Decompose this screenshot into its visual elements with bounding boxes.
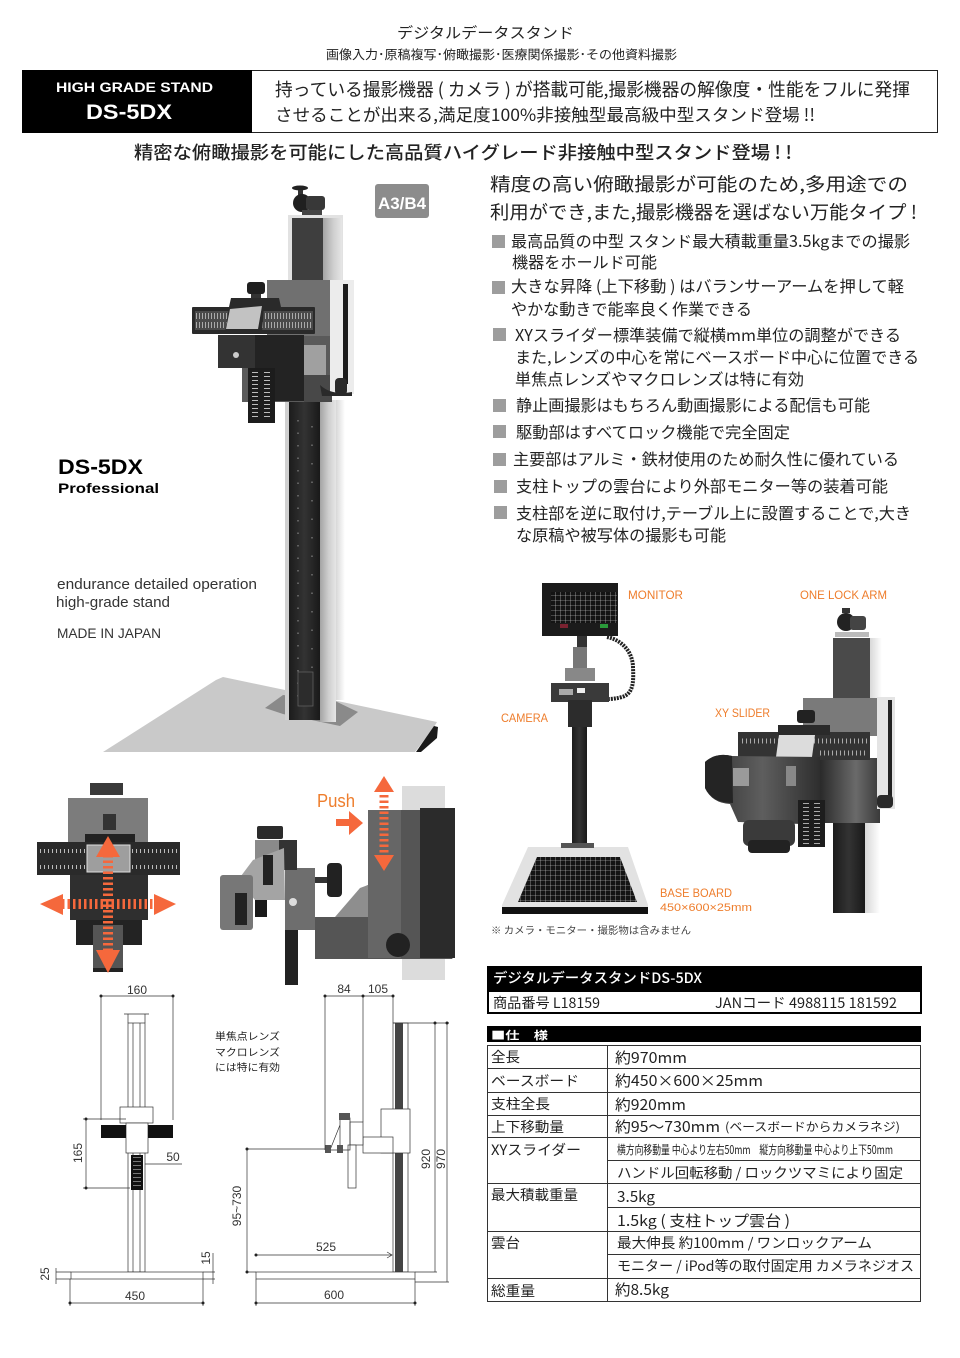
main stand photo bbox=[103, 186, 438, 752]
product badge bbox=[22, 70, 252, 133]
product badge: DS-5DX bbox=[86, 101, 172, 124]
product code panel: 商品番号 L18159 bbox=[493, 993, 600, 1013]
vertical push arrow bbox=[374, 776, 394, 871]
title: 画像入力･原稿複写･俯瞰撮影･医療関係撮影･その他資料撮影 bbox=[326, 44, 678, 63]
row values: ハンドル回転移動 / ロックツマミにより固定 bbox=[617, 1163, 903, 1183]
row values: モニター / iPod等の取付固定用 カメラネジオス bbox=[617, 1256, 914, 1276]
feature list: 単焦点レンズやマクロレンズは特に有効 bbox=[515, 366, 804, 390]
header description: させることが出来る,満足度100%非接触型最高級中型スタンド登場 !! bbox=[275, 101, 815, 126]
row values: 約450×600×25mm bbox=[615, 1070, 763, 1091]
label: base board: BASE BOARD bbox=[660, 886, 732, 900]
product code panel: デジタルデータスタンドDS-5DX bbox=[493, 968, 703, 988]
spec heading bbox=[487, 1026, 921, 1043]
feature list: また,レンズの中心を常にベースボード中心に位置できる bbox=[515, 344, 919, 368]
side dimension drawing: 84 bbox=[337, 982, 351, 996]
product badge: HIGH GRADE STAND bbox=[56, 80, 213, 95]
tagline: endurance detailed operation bbox=[57, 577, 257, 593]
row values: (ベースボードからカメラネジ) bbox=[725, 1118, 900, 1135]
dimension lines bbox=[56, 996, 215, 1306]
tagline: high-grade stand bbox=[56, 595, 170, 611]
XY slider front detail bbox=[37, 783, 180, 973]
XY slider rail bbox=[192, 298, 315, 334]
carriage bbox=[218, 280, 354, 402]
front dimension drawing: 450 bbox=[125, 1289, 145, 1303]
row labels: 支柱全長 bbox=[491, 1094, 550, 1114]
front dimension drawing: 165 bbox=[71, 1143, 85, 1163]
product code panel: JANコード 4988115 181592 bbox=[715, 993, 897, 1013]
row values: 約920mm bbox=[615, 1094, 686, 1115]
orange cross arrows bbox=[40, 836, 176, 973]
row values bbox=[615, 1047, 914, 1300]
base board bbox=[103, 677, 437, 752]
upper column bbox=[288, 215, 343, 281]
title: デジタルデータスタンド bbox=[397, 22, 574, 43]
label: base board bbox=[660, 886, 752, 914]
camera mount bbox=[257, 826, 283, 839]
foot plate bbox=[265, 695, 358, 726]
feature list: 支柱トップの雲台により外部モニター等の装着可能 bbox=[516, 473, 888, 497]
row values: 約95〜730mm bbox=[615, 1116, 720, 1137]
badge: A3/B4 bbox=[375, 184, 429, 218]
front dimension drawing: 15 bbox=[199, 1251, 213, 1265]
push arrow bbox=[336, 811, 363, 835]
header description bbox=[275, 76, 910, 126]
row labels: ベースボード bbox=[491, 1071, 579, 1091]
lens note: には特に有効 bbox=[215, 1059, 280, 1074]
label: camera: CAMERA bbox=[501, 711, 548, 725]
camera body bbox=[705, 755, 820, 824]
stem and column bbox=[551, 636, 609, 847]
note: ※ カメラ・モニター・撮影物は含みません bbox=[491, 922, 691, 937]
product label: Professional bbox=[58, 480, 159, 496]
side dimension drawing: 105 bbox=[368, 982, 388, 996]
tagline: MADE IN JAPAN bbox=[57, 625, 161, 641]
product label: DS-5DX bbox=[58, 456, 143, 479]
side dimension drawing: 600 bbox=[324, 1288, 344, 1302]
feature list: 最高品質の中型 スタンド最大積載重量3.5kgまでの撮影 bbox=[511, 228, 910, 252]
lens note bbox=[215, 1028, 280, 1074]
column bbox=[833, 638, 870, 698]
feature intro: 利用ができ,また,撮影機器を選ばない万能タイプ ! bbox=[490, 199, 917, 225]
setup photo: monitor, camera, base board bbox=[502, 583, 648, 914]
feature list: XYスライダー標準装備で縦横mm単位の調整ができる bbox=[515, 322, 901, 346]
front dimension drawing: 160 bbox=[127, 983, 147, 997]
feature list bbox=[492, 228, 919, 546]
main heading: 精密な俯瞰撮影を可能にした高品質ハイグレード非接触中型スタンド登場 ! ! bbox=[134, 139, 792, 165]
column bbox=[393, 1023, 408, 1272]
table grid bbox=[487, 1045, 921, 1302]
tagline bbox=[56, 577, 257, 641]
column outline bbox=[71, 1023, 203, 1279]
spec table bbox=[487, 1026, 921, 1302]
row values: 3.5kg bbox=[617, 1186, 656, 1207]
spec heading: ■仕 様 bbox=[491, 1027, 548, 1043]
carriage outline bbox=[256, 1109, 415, 1279]
ball head bbox=[835, 608, 869, 637]
balancer arm side detail bbox=[220, 776, 455, 985]
row labels: 上下移動量 bbox=[491, 1117, 564, 1137]
product label bbox=[58, 456, 159, 496]
side dimension drawing: 525 bbox=[316, 1240, 336, 1254]
lower column bbox=[285, 400, 345, 722]
row values: 約970mm bbox=[615, 1047, 687, 1068]
dimension lines bbox=[247, 996, 449, 1306]
monitor bbox=[542, 583, 618, 636]
carriage bbox=[803, 698, 877, 736]
scale bbox=[798, 800, 825, 847]
side dimension drawing bbox=[230, 982, 449, 1306]
feature list: 支柱部を逆に取付け,テーブル上に設置することで,大き bbox=[516, 500, 911, 524]
row labels: 全長 bbox=[491, 1047, 520, 1067]
label: base board: 450×600×25mm bbox=[660, 902, 752, 914]
row labels: 総重量 bbox=[491, 1281, 535, 1301]
label: monitor: MONITOR bbox=[628, 588, 683, 602]
side dimension drawing: 970 bbox=[434, 1149, 448, 1169]
feature intro: 精度の高い俯瞰撮影が可能のため,多用途での bbox=[490, 171, 908, 197]
feature list: 機器をホールド可能 bbox=[512, 249, 657, 273]
ball head bbox=[292, 186, 325, 215]
header description: 持っている撮影機器 ( カメラ ) が搭載可能,撮影機器の解像度・性能をフルに発揮 bbox=[275, 76, 910, 102]
label: XY slider: XY SLIDER bbox=[715, 706, 770, 720]
row values: 1.5kg ( 支柱トップ雲台 ) bbox=[617, 1210, 790, 1231]
title bbox=[326, 22, 678, 63]
front dimension drawing: 25 bbox=[38, 1267, 52, 1281]
feature list: な原稿や被写体の撮影も可能 bbox=[516, 522, 726, 546]
feature list: 駆動部はすべてロック機能で完全固定 bbox=[516, 419, 790, 443]
slider bbox=[738, 732, 870, 760]
side dimension drawing: 95~730 bbox=[230, 1185, 244, 1226]
product code panel bbox=[487, 966, 922, 1014]
badge: A3/B4: A3/B4 bbox=[378, 194, 427, 213]
front dimension drawing bbox=[38, 983, 215, 1306]
row labels: XYスライダー bbox=[491, 1140, 581, 1160]
row labels: 最大積載重量 bbox=[491, 1185, 578, 1205]
row values: 約8.5kg bbox=[615, 1279, 670, 1300]
front dimension drawing: 50 bbox=[166, 1150, 180, 1164]
row labels: 雲台 bbox=[491, 1233, 520, 1253]
feature list: 主要部はアルミ・鉄材使用のため耐久性に優れている bbox=[513, 446, 899, 470]
lens note: 単焦点レンズ bbox=[215, 1028, 280, 1043]
vertical scale bbox=[248, 368, 275, 423]
side dimension drawing: 920 bbox=[419, 1149, 433, 1169]
row labels bbox=[491, 1047, 581, 1301]
row values: 最大伸長 約100mm / ワンロックアーム bbox=[617, 1233, 872, 1253]
label: one lock arm: ONE LOCK ARM bbox=[800, 588, 887, 602]
camera on slider photo bbox=[705, 608, 895, 913]
lens bbox=[743, 820, 795, 846]
lens note: マクロレンズ bbox=[215, 1044, 280, 1059]
coiled cable bbox=[598, 637, 633, 699]
header band bbox=[22, 70, 938, 133]
feature list: 静止画撮影はもちろん動画撮影による配信も可能 bbox=[516, 392, 870, 416]
feature list: やかな動きで能率良く作業できる bbox=[511, 296, 752, 320]
feature list: 大きな昇降 (上下移動 ) はバランサーアームを押して軽 bbox=[511, 273, 904, 297]
feature intro bbox=[490, 171, 917, 225]
base board bbox=[502, 843, 648, 914]
push label: Push bbox=[317, 791, 355, 811]
